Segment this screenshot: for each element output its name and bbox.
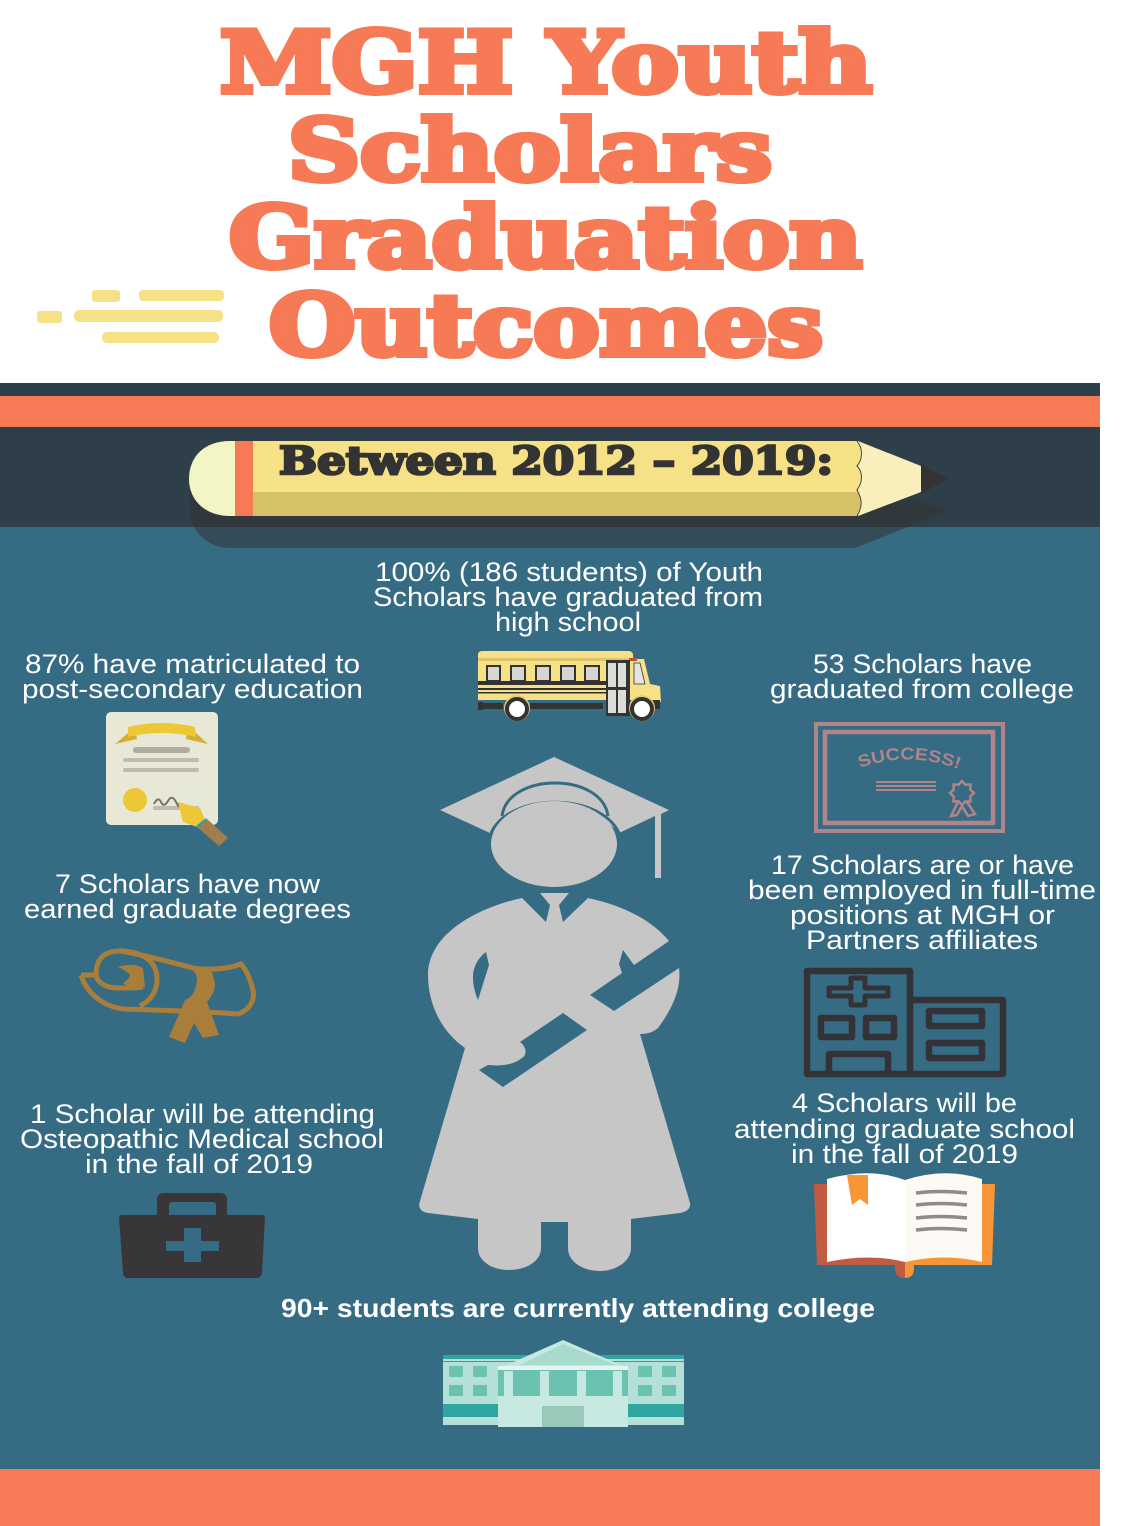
text: employed at MGH: Partners affiliates: [806, 925, 1038, 955]
icon: yellow speed lines: [37, 290, 224, 343]
pencil ferrule: [235, 441, 253, 516]
text: employed at MGH: 17 Scholars are or have: [771, 850, 1074, 880]
dark header band: [0, 427, 1100, 527]
text: employed at MGH: [748, 850, 1096, 955]
text: graduate degrees: earned graduate degrees: [24, 894, 351, 924]
gown: [419, 893, 690, 1271]
text: osteopathic medical school: in the fall of 2019: [85, 1149, 313, 1179]
text: college graduates: graduated from college: [770, 674, 1074, 704]
pencil shadow: [189, 475, 948, 548]
top orange band: [0, 396, 1100, 427]
pencil heading: Between 2012 – 2019:: [279, 438, 833, 483]
head: [491, 801, 617, 887]
icon: school bus: [478, 651, 661, 721]
text: college graduates: 53 Scholars have: [813, 649, 1032, 679]
text: attending graduate school: [734, 1088, 1075, 1169]
icon: success diploma: SUCCESS!: [858, 748, 961, 768]
text: college graduates: [770, 649, 1074, 704]
title: Graduation: [229, 188, 862, 287]
pencil eraser: [189, 441, 235, 516]
icon: hospital: [807, 971, 1003, 1074]
text: attending graduate school: in the fall of 2019: [791, 1139, 1018, 1169]
text: graduate degrees: 7 Scholars have now: [55, 869, 321, 899]
pencil lead: [921, 464, 948, 494]
graduate figure: [419, 757, 690, 1271]
text: employed at MGH: positions at MGH or: [790, 900, 1055, 930]
text: attending graduate school: 4 Scholars will be: [792, 1088, 1017, 1118]
graduation cap: [440, 757, 669, 878]
text: post-secondary: post-secondary education: [22, 674, 363, 704]
text: high school graduates: 100% (186 students) of Youth: [375, 557, 763, 587]
text: employed at MGH: been employed in full-time: [748, 875, 1096, 905]
icon: open book: [814, 1173, 995, 1278]
cap band arc: [502, 783, 608, 816]
text: post-secondary: 87% have matriculated to: [25, 649, 360, 679]
icon: medical bag: [119, 1193, 265, 1278]
title: MGH Youth: [220, 13, 872, 112]
text: osteopathic medical school: [20, 1099, 384, 1179]
icon: college building: [443, 1340, 684, 1427]
text: osteopathic medical school: 1 Scholar will be attending: [30, 1099, 375, 1129]
bottom orange band: [0, 1469, 1100, 1526]
icon: scroll: [81, 951, 253, 1043]
pencil wood tip: [858, 441, 921, 516]
icon: certificate with pen: [106, 712, 228, 846]
pencil body: [253, 441, 862, 516]
icon: success diploma: [814, 722, 1005, 833]
title: [220, 13, 872, 375]
text: high school graduates: high school: [495, 607, 641, 637]
text: attending graduate school: attending graduate school: [734, 1114, 1075, 1144]
text: post-secondary: [22, 649, 363, 704]
text: high school graduates: Scholars have graduated from: [373, 582, 763, 612]
main blue panel: [0, 527, 1100, 1469]
text: graduate degrees: [24, 869, 351, 924]
title: Outcomes: [269, 276, 823, 375]
text: high school graduates: [373, 557, 763, 637]
title: Scholars: [288, 101, 772, 200]
top dark band: [0, 383, 1100, 396]
text: currently attending college: 90+ students are currently attending college: [281, 1293, 875, 1323]
pencil banner: [189, 438, 948, 548]
text: osteopathic medical school: Osteopathic Medical school: [20, 1124, 384, 1154]
